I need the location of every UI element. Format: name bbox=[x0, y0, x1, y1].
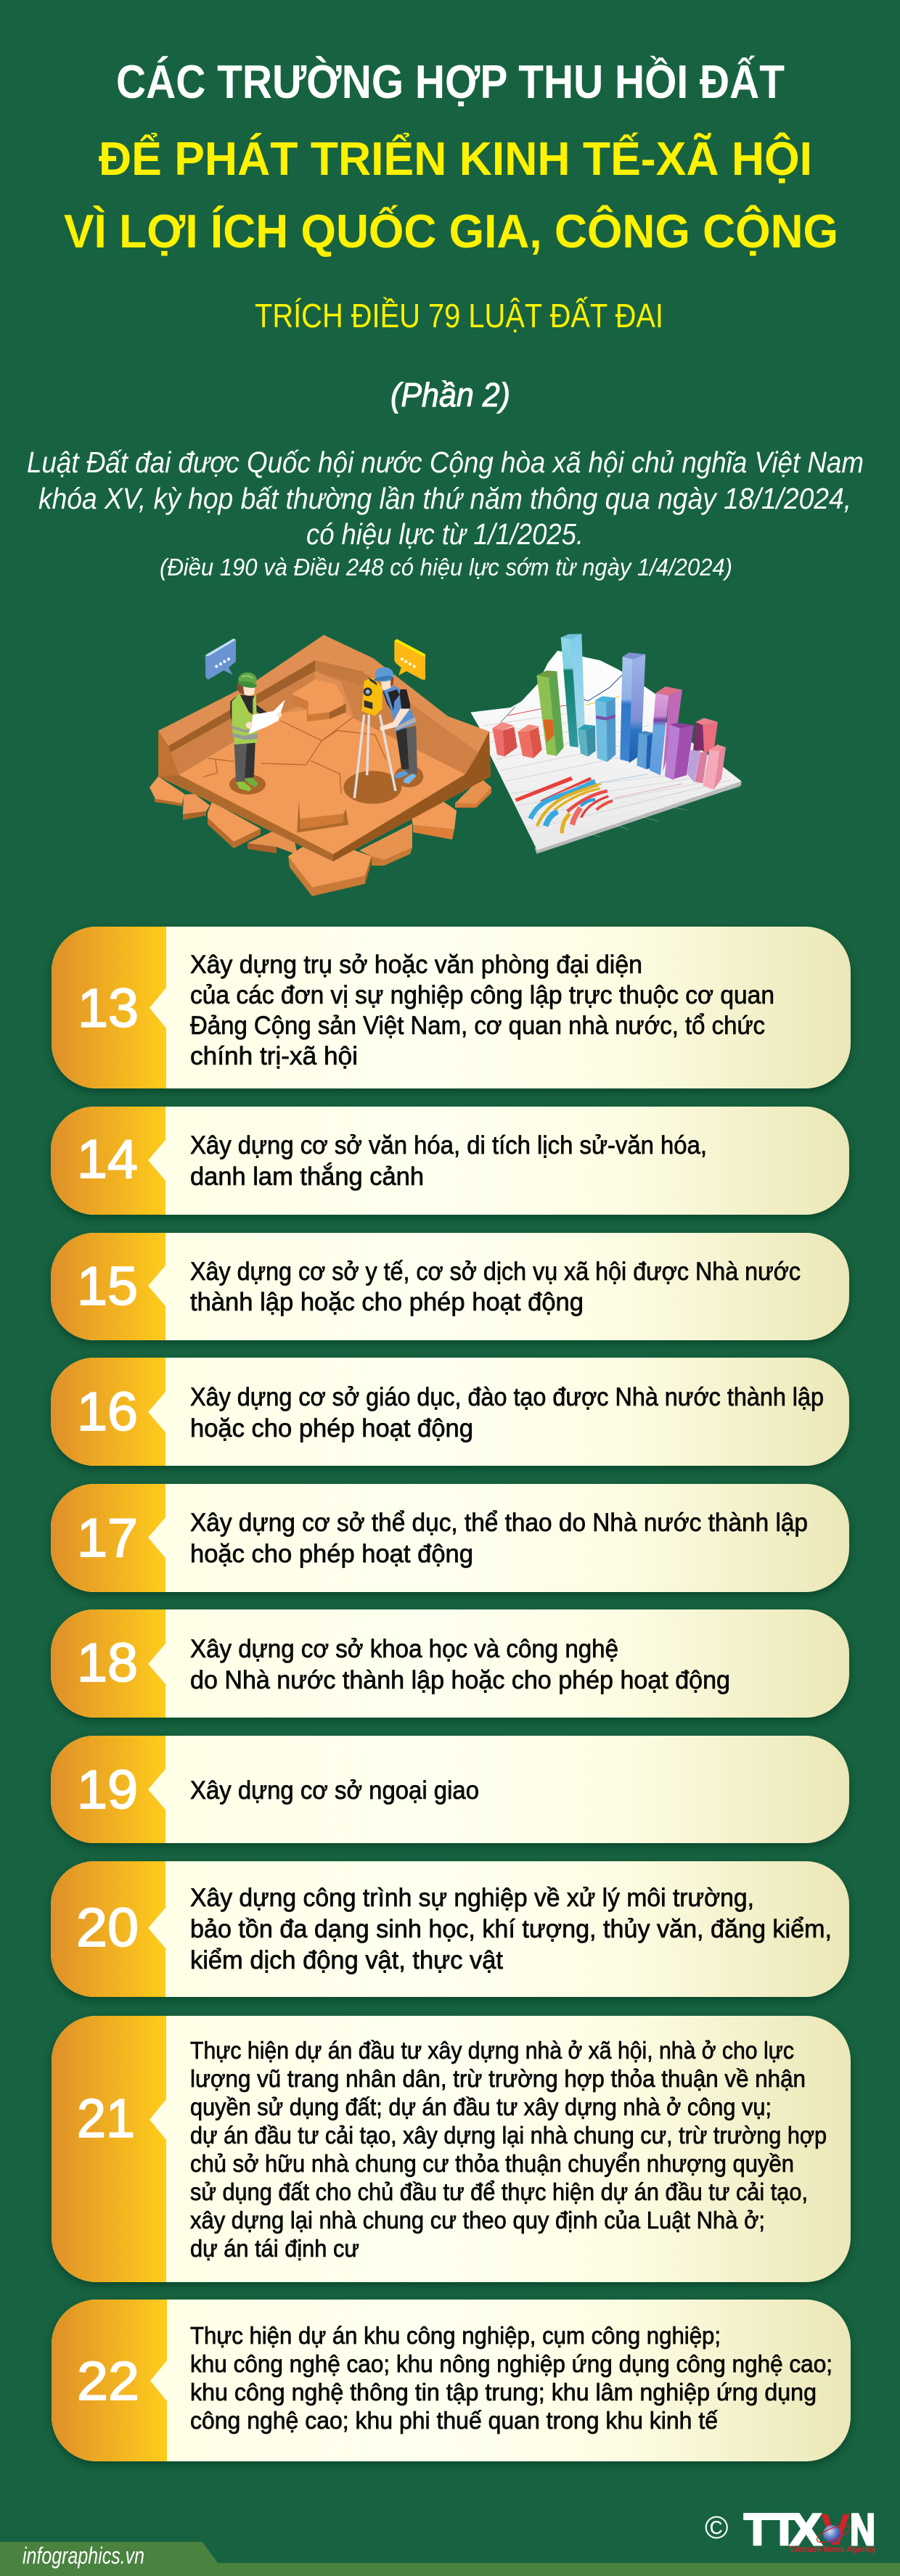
tripod with theodolite bbox=[354, 677, 396, 798]
number tab bbox=[52, 2016, 166, 2282]
card background bbox=[51, 1484, 849, 1592]
card text: hoặc cho phép hoạt động bbox=[190, 1414, 473, 1443]
front boulder bbox=[297, 787, 348, 832]
footer bar with tab bbox=[0, 2542, 900, 2576]
card text: khu công nghệ cao; khu nông nghiệp ứng dụng công nghệ cao; bbox=[190, 2350, 832, 2377]
card text: Thực hiện dự án khu công nghiệp, cụm công nghiệp; bbox=[190, 2322, 721, 2349]
number tab bbox=[51, 1233, 165, 1340]
card 13 bbox=[52, 927, 851, 1088]
card text: bảo tồn đa dạng sinh học, khí tượng, thủy văn, đăng kiểm, bbox=[190, 1915, 832, 1943]
number: 17 bbox=[77, 1507, 138, 1568]
card background bbox=[51, 1736, 849, 1843]
intro paragraph: có hiệu lực từ 1/1/2025. bbox=[306, 517, 584, 551]
details in surveyor scene bbox=[203, 639, 425, 832]
TTXVN logo: N bbox=[850, 2505, 875, 2554]
card text: sử dụng đất cho chủ đầu tư để thực hiện dự án đầu tư cải tạo, bbox=[190, 2178, 808, 2205]
curved ribbons bbox=[515, 776, 613, 833]
part label: (Phần 2) bbox=[390, 376, 510, 414]
card text bbox=[190, 2322, 832, 2434]
number: 13 bbox=[78, 977, 139, 1038]
surveyor worker bbox=[374, 667, 417, 784]
card text: Xây dựng cơ sở ngoại giao bbox=[190, 1776, 479, 1805]
number: 14 bbox=[77, 1128, 138, 1189]
intro paragraph: (Điều 190 và Điều 248 có hiệu lực sớm từ ngày 1/4/2024) bbox=[160, 554, 732, 581]
card text: lượng vũ trang nhân dân, trừ trường hợp thỏa thuận về nhận bbox=[190, 2065, 806, 2092]
chart paper bbox=[470, 649, 742, 854]
number tab bbox=[51, 1484, 165, 1592]
agency name: Vietnam News Agency bbox=[790, 2546, 877, 2554]
number tab bbox=[51, 1736, 165, 1843]
number tab bbox=[51, 1358, 165, 1466]
card background bbox=[51, 1233, 849, 1340]
card text: dự án tái định cư bbox=[190, 2235, 359, 2262]
card text: xây dựng lại nhà chung cư theo quy định của Luật Nhà ở; bbox=[190, 2207, 765, 2234]
card 16 bbox=[51, 1358, 849, 1466]
number tab bbox=[52, 2300, 167, 2461]
back boulder bbox=[292, 680, 346, 721]
TTXVN logo: TT bbox=[744, 2505, 798, 2554]
illustration: excavated land with surveyors bbox=[150, 635, 491, 896]
card background bbox=[51, 1861, 849, 1997]
number: 20 bbox=[76, 1897, 139, 1958]
intro paragraph bbox=[27, 446, 864, 581]
number tab bbox=[52, 927, 166, 1088]
card text: quyền sử dụng đất; dự án đầu tư xây dựng nhà ở công vụ; bbox=[190, 2093, 772, 2120]
card text: của các đơn vị sự nghiệp công lập trực thuộc cơ quan bbox=[190, 981, 774, 1009]
worker with plan bbox=[230, 673, 285, 792]
card text: do Nhà nước thành lập hoặc cho phép hoạt động bbox=[190, 1666, 730, 1694]
subtitle: article reference: TRÍCH ĐIỀU 79 LUẬT ĐẤT ĐAI bbox=[255, 297, 663, 335]
card text: chính trị-xã hội bbox=[190, 1042, 358, 1070]
main rock block bbox=[158, 635, 491, 861]
card background bbox=[51, 1609, 849, 1718]
title bbox=[64, 55, 838, 258]
number: 21 bbox=[77, 2088, 135, 2149]
card text bbox=[190, 1131, 707, 1191]
card text bbox=[190, 2037, 827, 2262]
card text: danh lam thắng cảnh bbox=[190, 1162, 424, 1191]
illustration: 3D bar chart on paper bbox=[470, 633, 742, 854]
card 17 bbox=[51, 1484, 849, 1592]
number tab bbox=[51, 1609, 165, 1718]
card text: Xây dựng cơ sở văn hóa, di tích lịch sử-văn hóa, bbox=[190, 1131, 707, 1160]
card background bbox=[52, 2016, 851, 2282]
card 22 bbox=[52, 2300, 851, 2461]
card text: Xây dựng cơ sở thể dục, thể thao do Nhà nước thành lập bbox=[190, 1509, 808, 1537]
card text: kiểm dịch động vật, thực vật bbox=[190, 1946, 503, 1974]
card text: dự án đầu tư cải tạo, xây dựng lại nhà chung cư, trừ trường hợp bbox=[190, 2122, 827, 2149]
card text: công nghệ cao; khu phi thuế quan trong khu kinh tế bbox=[190, 2407, 718, 2434]
card background bbox=[52, 927, 851, 1088]
card text: Xây dựng cơ sở giáo dục, đào tạo được Nhà nước thành lập bbox=[190, 1383, 824, 1411]
TTXVN logo: X bbox=[790, 2505, 822, 2554]
card text: Xây dựng công trình sự nghiệp về xử lý môi trường, bbox=[190, 1884, 754, 1912]
card 21 bbox=[52, 2016, 851, 2282]
card 19 bbox=[51, 1736, 849, 1843]
card text bbox=[190, 1635, 730, 1694]
number: 18 bbox=[77, 1632, 138, 1693]
card background bbox=[51, 1107, 849, 1215]
card text: Xây dựng cơ sở khoa học và công nghệ bbox=[190, 1635, 618, 1663]
card text: Thực hiện dự án đầu tư xây dựng nhà ở xã hội, nhà ở cho lực bbox=[190, 2037, 794, 2064]
card text: chủ sở hữu nhà chung cư thỏa thuận chuyển nhượng quyền bbox=[190, 2150, 794, 2177]
number tab bbox=[51, 1861, 165, 1997]
card text bbox=[190, 1884, 832, 1974]
card text bbox=[190, 1509, 808, 1568]
website credit: infographics.vn bbox=[22, 2543, 144, 2569]
card 15 bbox=[51, 1233, 849, 1340]
number tab bbox=[51, 1107, 165, 1215]
copyright mark: © bbox=[705, 2510, 728, 2546]
card text: thành lập hoặc cho phép hoạt động bbox=[190, 1288, 584, 1316]
title line 2: ĐỂ PHÁT TRIỂN KINH TẾ-XÃ HỘI bbox=[99, 132, 812, 185]
card background bbox=[51, 1358, 849, 1466]
card text: Đảng Cộng sản Việt Nam, cơ quan nhà nước, tổ chức bbox=[190, 1012, 765, 1040]
card text: hoặc cho phép hoạt động bbox=[190, 1540, 473, 1568]
card text: khu công nghệ thông tin tập trung; khu lâm nghiệp ứng dụng bbox=[190, 2379, 817, 2405]
number: 22 bbox=[77, 2350, 139, 2411]
ground shadows bbox=[229, 766, 423, 804]
speech bubble: yellow bbox=[394, 639, 425, 680]
lower rocks bbox=[150, 776, 491, 896]
card 18 bbox=[51, 1609, 849, 1718]
number: 15 bbox=[77, 1255, 138, 1316]
bars bbox=[492, 633, 726, 789]
title line 3: VÌ LỢI ÍCH QUỐC GIA, CÔNG CỘNG bbox=[64, 205, 838, 258]
TTXVN logo bbox=[744, 2505, 877, 2554]
card text bbox=[190, 951, 774, 1070]
globe emblem bbox=[815, 2522, 851, 2546]
card 20 bbox=[51, 1861, 849, 1997]
speech bubble: blue bbox=[205, 639, 236, 680]
TTXVN logo: V bbox=[821, 2505, 850, 2554]
card text: Xây dựng trụ sở hoặc văn phòng đại diện bbox=[190, 951, 642, 979]
card text: Xây dựng cơ sở y tế, cơ sở dịch vụ xã hội được Nhà nước bbox=[190, 1258, 801, 1286]
card text bbox=[190, 1258, 801, 1316]
card 14 bbox=[51, 1107, 849, 1215]
title line 1: CÁC TRƯỜNG HỢP THU HỒI ĐẤT bbox=[116, 55, 785, 108]
number: 16 bbox=[77, 1381, 138, 1442]
ground cracks bbox=[203, 717, 386, 793]
card background bbox=[52, 2300, 851, 2461]
card text bbox=[190, 1383, 824, 1443]
number: 19 bbox=[77, 1759, 138, 1820]
